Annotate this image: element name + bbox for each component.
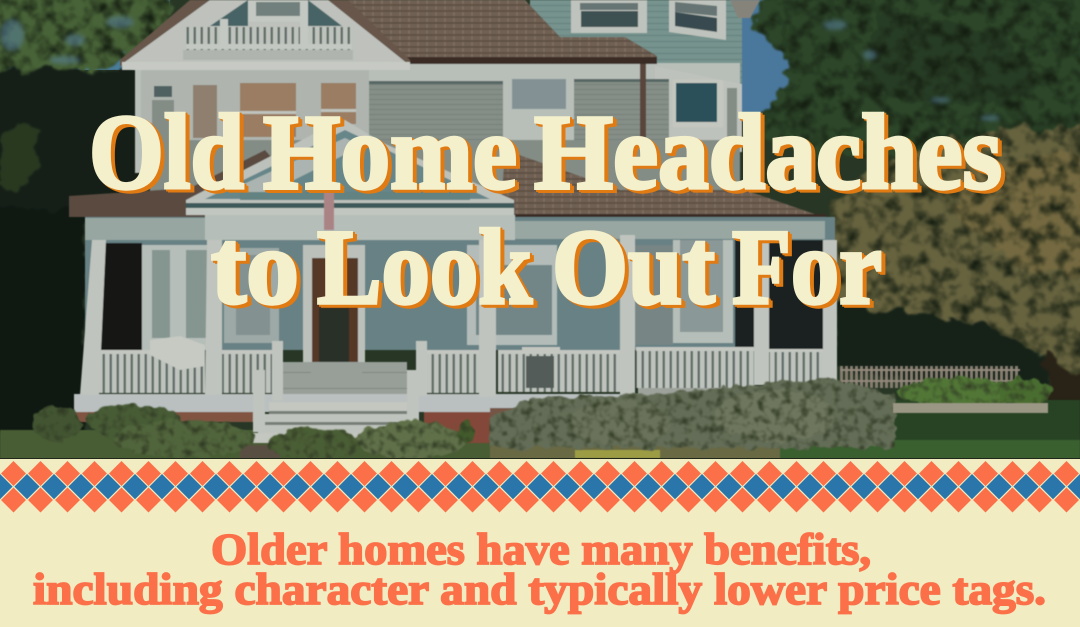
title: to [211,209,299,327]
shrubs and garden beds [33,377,1053,460]
lower siding [150,140,740,200]
porch wall [85,215,835,350]
front door [302,245,365,387]
house [69,0,838,443]
title: Home [263,94,517,212]
front gable with balcony [120,0,410,70]
trees: shaded foliage [0,70,1080,435]
porch railings [98,336,837,393]
ground: lawn and bed [0,400,1080,459]
dark edge above panel [0,458,1080,459]
title [89,94,1002,327]
porch floor and steps [74,362,838,443]
title: Old [89,94,244,212]
subtitle text [33,525,1046,614]
flag [324,190,334,230]
title: Out [552,209,715,327]
diamond pattern band [0,459,1080,514]
subtitle text: including character and typically lower price tags. [33,565,1046,614]
bay windows [141,70,369,150]
trees: background foliage [0,0,1080,410]
tower [530,0,760,90]
title: Look [317,209,532,327]
dim overlay on photo [0,0,1080,459]
fence [840,366,1020,388]
main roof [340,0,657,63]
sky [0,0,820,115]
title: Headaches [534,94,1002,212]
sky gaps through foliage [0,16,1000,121]
title: For [732,209,882,327]
porch roof [69,120,826,222]
upper wall [135,57,742,173]
lower cream panel [0,459,1080,627]
photo: Victorian house with wraparound porch [0,0,1080,460]
porch columns and newel posts [80,235,837,432]
subtitle text: Older homes have many benefits, [211,525,871,574]
garden wall [893,403,1048,413]
